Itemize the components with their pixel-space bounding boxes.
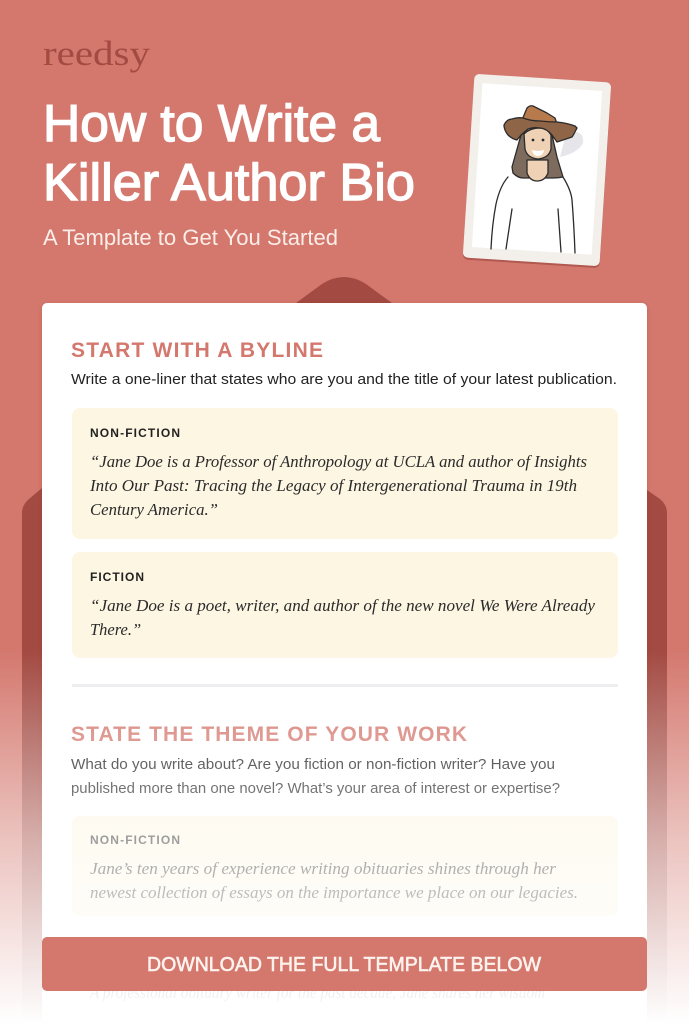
- example box: fiction: “Jane Doe is a poet, writer, and author of the new novel We Were Already: [90, 596, 596, 615]
- intro text: Write a one-liner that states who are you and the title of your latest publication.: [71, 371, 617, 388]
- download button: DOWNLOAD THE FULL TEMPLATE BELOW: [147, 954, 541, 976]
- example box: fiction: [72, 552, 618, 658]
- title: [43, 95, 415, 212]
- theme intro text: [71, 756, 560, 797]
- heading: start with a byline: START WITH A BYLINE: [71, 339, 323, 362]
- example box: non-fiction: Into Our Past: Tracing the Legacy of Intergenerational Trauma in 19th: [89, 476, 577, 495]
- logo: reedsy: [43, 34, 151, 73]
- example box: faded non-fiction: newest collection of essays on the importance we place on our legacies.: [90, 883, 578, 902]
- download button: [42, 937, 647, 991]
- title: How to Write a: [43, 95, 380, 153]
- icon: author portrait: [491, 106, 583, 253]
- example box: non-fiction: “Jane Doe is a Professor of Anthropology at UCLA and author of Insights: [90, 452, 587, 471]
- main card: [42, 303, 647, 1024]
- title: Killer Author Bio: [43, 154, 415, 212]
- example box: faded non-fiction: NON-FICTION: [90, 833, 180, 847]
- example box: non-fiction: [72, 408, 618, 539]
- faded text under button: A professional obituary writer for the past decade, Jane shares her wisdom: [89, 983, 545, 1002]
- example box: non-fiction: NON-FICTION: [90, 426, 180, 440]
- section: start with a byline: [71, 339, 618, 658]
- section: state the theme of your work: [71, 723, 618, 1002]
- example box: faded non-fiction: [72, 816, 618, 916]
- envelope behind card: [22, 277, 667, 1024]
- example box: non-fiction: Century America.”: [90, 500, 218, 519]
- heading: state the theme: STATE THE THEME OF YOUR WORK: [71, 723, 467, 746]
- author photo card: [463, 74, 611, 268]
- example box: faded non-fiction: Jane’s ten years of experience writing obituaries shines through her: [90, 859, 557, 878]
- example box: fiction: There.”: [90, 620, 141, 639]
- theme intro text: What do you write about? Are you fiction or non-fiction writer? Have you: [71, 756, 555, 773]
- example box: fiction: FICTION: [90, 570, 144, 584]
- theme intro text: published more than one novel? What’s your area of interest or expertise?: [71, 780, 560, 797]
- bottom white fade: [0, 650, 689, 1024]
- subtitle: A Template to Get You Started: [43, 225, 338, 250]
